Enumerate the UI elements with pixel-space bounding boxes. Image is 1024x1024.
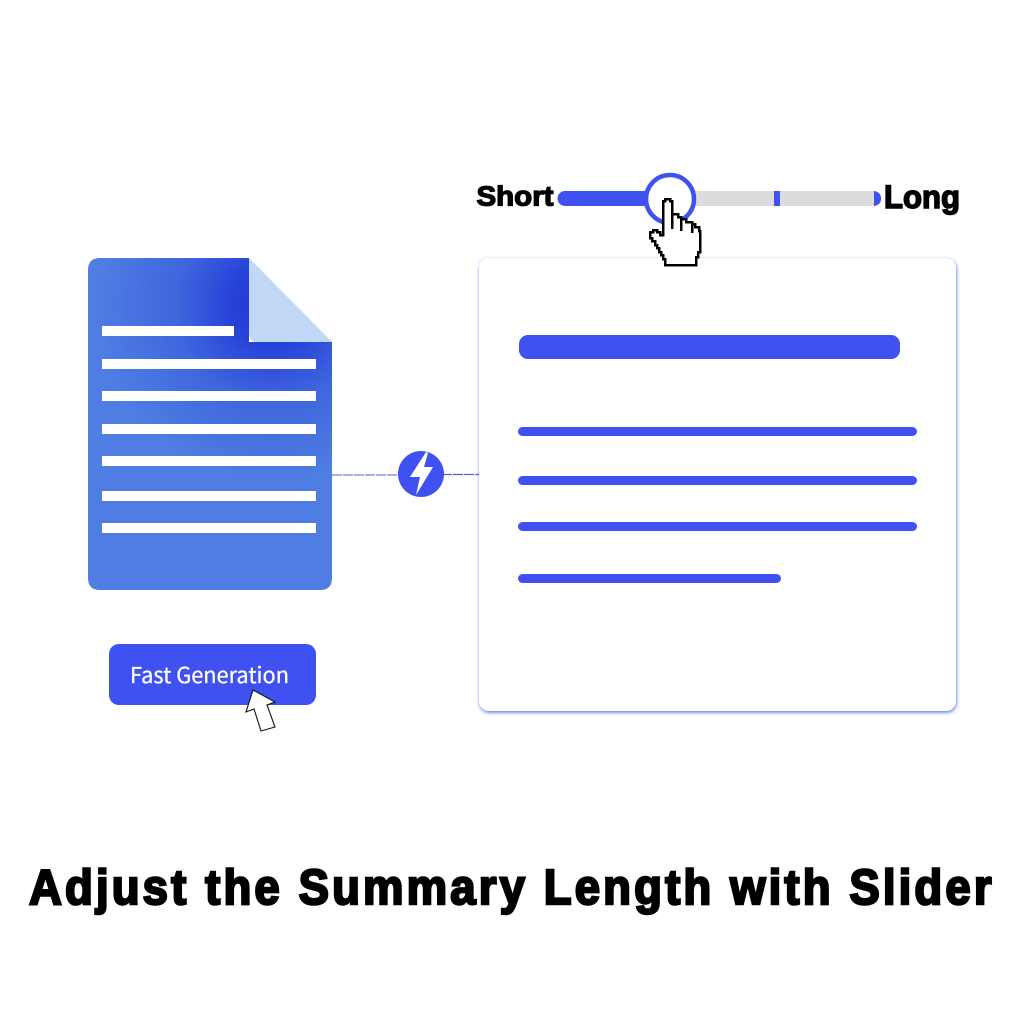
slider tick — [774, 191, 780, 206]
button: Fast Generation — [109, 644, 316, 705]
label: Long: Long — [884, 179, 960, 215]
summary text lines — [518, 427, 917, 583]
connector line — [332, 474, 479, 476]
slider — [558, 175, 881, 223]
label: Short: Short — [476, 180, 554, 212]
slider end cap — [874, 191, 881, 206]
document text lines — [102, 326, 316, 533]
slider track — [650, 191, 876, 206]
slider filled portion — [558, 191, 650, 206]
icon: pointer hand — [650, 199, 700, 265]
icon: document — [88, 258, 332, 590]
panel: summary card — [479, 258, 956, 711]
slider knob — [646, 175, 694, 223]
hand finger lines — [672, 214, 692, 233]
icon: folded corner — [249, 258, 332, 342]
title: Adjust the Summary Length with Slider — [29, 861, 992, 915]
icon: lightning badge — [398, 451, 444, 497]
icon: arrow cursor — [246, 690, 275, 731]
button: Fast Generation: Fast Generation — [130, 658, 289, 690]
summary heading bar — [519, 335, 900, 359]
